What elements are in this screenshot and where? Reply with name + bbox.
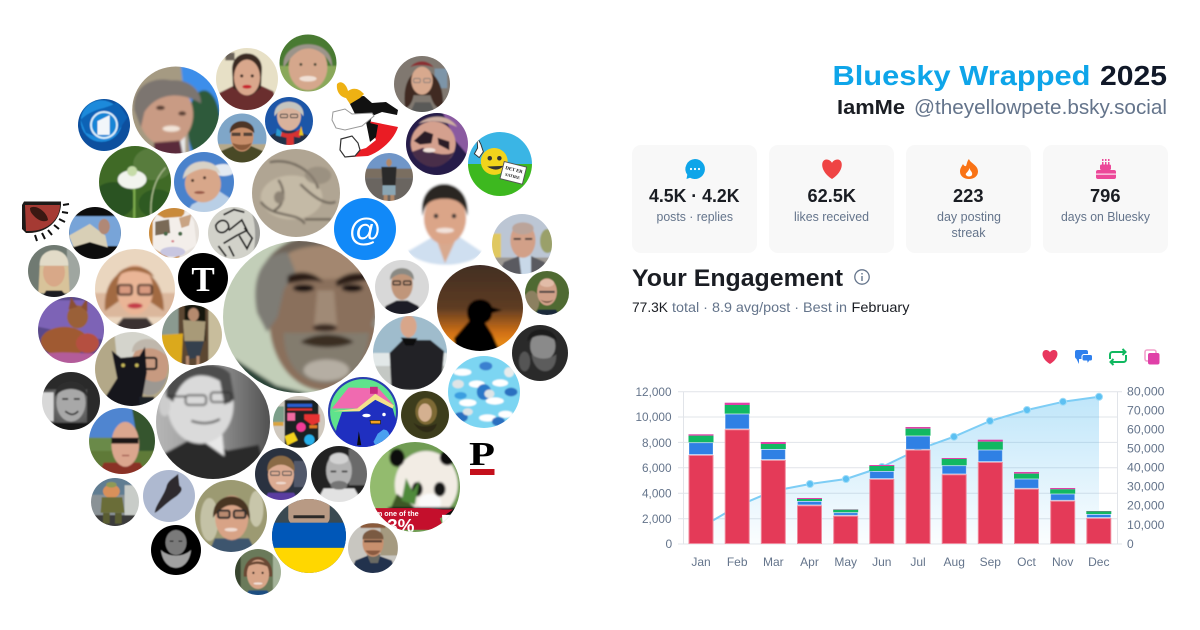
- avatar: man with beard in purple light: [397, 104, 477, 184]
- stat card: day posting streak: 223: [953, 186, 984, 206]
- avatar: bald man among greenery: [518, 264, 576, 322]
- icon: cake: [1096, 159, 1116, 179]
- avatar: Goofy cartoon: [332, 82, 398, 157]
- avatar: woman with red lipstick: [216, 48, 278, 110]
- avatar: tabby cat on purple blanket: [38, 297, 104, 363]
- left axis labels: 4,000: [642, 486, 672, 500]
- stat card: days on Bluesky: [1043, 145, 1168, 253]
- right axis labels: 50,000: [1127, 442, 1165, 456]
- avatar: man on promenade: [358, 146, 420, 208]
- avatar: bald man with sunglasses: [89, 408, 155, 474]
- avatar: emoji with DET ER SATIRE sign: [462, 126, 538, 202]
- stat card: posts and replies: [632, 145, 757, 253]
- icon: heart: [822, 160, 842, 179]
- profile name and handle: @theyellowpete.bsky.social: [914, 97, 1167, 119]
- right axis labels: 0: [1127, 537, 1134, 551]
- profile name and handle: IamMe: [837, 97, 905, 119]
- avatar: cut-out man in light shirt: [386, 166, 504, 284]
- engagement summary: total · 8.9 avg/post · Best in: [672, 299, 847, 315]
- avatar: pencil sketch: [252, 149, 340, 237]
- stat card: likes received: [769, 145, 894, 253]
- month labels: Sep: [980, 555, 1001, 569]
- avatar: news globe: [78, 99, 130, 151]
- icon: flame: [960, 159, 978, 179]
- avatar: older woman on green: [280, 34, 336, 92]
- avatar: man with glasses and purple shirt: [255, 448, 307, 500]
- stat card: likes received: likes received: [794, 209, 869, 224]
- avatar: eagle in pale sky: [143, 470, 195, 522]
- avatar: man in navy shirt: [348, 523, 398, 573]
- avatar: bearded man with black cat: [95, 332, 169, 406]
- stat card: day posting streak: [906, 145, 1031, 253]
- avatar: man in black jacket at the sea: [373, 316, 447, 390]
- avatar: black board with stickers: [273, 396, 325, 448]
- month labels: [691, 555, 1109, 569]
- avatar: cartoon fox soldier: [91, 478, 139, 526]
- avatar: ink drawing: [208, 207, 260, 259]
- stat card: likes received: 62.5K: [808, 186, 856, 206]
- avatar cluster: [20, 26, 576, 602]
- left axis labels: [636, 385, 672, 551]
- avatar: blue duck with pink book hat: [328, 377, 398, 447]
- replies segments: [689, 414, 1111, 518]
- cumulative points: [698, 393, 1102, 531]
- likes segments: [689, 430, 1111, 544]
- icon: heart legend: [1043, 350, 1057, 364]
- icon: quotes legend: [1145, 350, 1160, 364]
- avatar: red turtle eye emblem: [22, 202, 69, 241]
- avatar: bald man in grey suit: [483, 205, 561, 283]
- right axis labels: 60,000: [1127, 422, 1165, 436]
- title: Bluesky Wrapped: [832, 60, 1090, 91]
- logo: P with red bar: P: [469, 436, 495, 473]
- left axis labels: 12,000: [636, 385, 672, 399]
- left axis labels: 2,000: [642, 512, 672, 526]
- left axis labels: 10,000: [636, 410, 672, 424]
- avatar: cat: [149, 208, 199, 258]
- cumulative line: [701, 397, 1099, 528]
- month labels: Feb: [727, 555, 748, 569]
- avatar: old man under blue sky: [174, 152, 234, 212]
- month labels: Apr: [800, 555, 819, 569]
- left axis labels: 8,000: [642, 436, 672, 450]
- month labels: Dec: [1088, 555, 1109, 569]
- title: 2025: [1100, 60, 1167, 91]
- avatar: woman with dark glasses: [195, 480, 267, 552]
- icon: replies legend: [1075, 350, 1092, 364]
- avatar: child in the shadows: [401, 391, 449, 439]
- cumulative area: [701, 397, 1099, 544]
- stat card: day posting streak: day posting: [937, 209, 1001, 224]
- chart legend icons: [1043, 349, 1160, 365]
- right axis labels: 30,000: [1127, 480, 1165, 494]
- quotes segments: [688, 403, 1111, 512]
- avatar: at-sign on blue: [325, 189, 405, 269]
- avatar: black and white smiling man: [42, 372, 100, 430]
- avatar: man in doorway with yellow table: [162, 305, 222, 365]
- engagement summary: February: [852, 299, 910, 315]
- avatar: young woman with headset: [386, 48, 458, 120]
- avatar: Ukraine flag with eyes: [272, 499, 346, 573]
- avatar: large black and white man with glasses: [156, 365, 270, 479]
- left axis labels: 6,000: [642, 461, 672, 475]
- avatar: New York Times logo: [178, 253, 228, 303]
- right axis labels: 10,000: [1127, 518, 1165, 532]
- heading: Your Engagement: Your Engagement: [632, 265, 843, 292]
- right axis labels: [1127, 384, 1165, 551]
- avatar: woman with rainbow scarf: [265, 97, 313, 145]
- right axis labels: 40,000: [1127, 460, 1165, 474]
- avatar: bearded man engraving: [512, 325, 568, 381]
- avatar: white flower: [99, 146, 171, 218]
- avatar: man in glasses outdoors: [218, 114, 266, 162]
- month labels: Jun: [872, 555, 891, 569]
- avatar: selfie man with tree: [132, 66, 220, 154]
- avatar: greyscale bald man: [311, 446, 367, 502]
- avatar: at-sign on blue: @: [348, 212, 382, 248]
- stat card: day posting streak: streak: [952, 225, 986, 240]
- icon: reposts legend: [1110, 349, 1126, 365]
- right axis labels: 80,000: [1127, 384, 1165, 398]
- month labels: Jan: [691, 555, 711, 569]
- avatar: blonde woman in beanie: [28, 245, 80, 297]
- stat card: days on Bluesky: 796: [1090, 186, 1120, 206]
- avatar: bearded man in greyscale on black: [151, 525, 201, 575]
- avatar: large portrait of man with grey hair: [223, 241, 375, 393]
- grid lines: [678, 392, 1122, 544]
- stat card: posts and replies: 4.5K · 4.2K: [649, 186, 740, 206]
- avatar: man in grey glasses: [367, 252, 437, 322]
- stat card: posts and replies: posts · replies: [656, 209, 733, 224]
- avatar: silhouette in sunset: [437, 265, 523, 351]
- reposts segments: [688, 405, 1111, 514]
- avatar: smiling woman among trees: [235, 549, 281, 595]
- right axis labels: 20,000: [1127, 498, 1165, 512]
- icon: chat bubble: [685, 159, 705, 179]
- stacked bar and cumulative line chart: [636, 384, 1165, 569]
- avatar: New York Times logo: T: [191, 260, 215, 299]
- engagement summary: 77.3K: [632, 299, 669, 315]
- engagement summary: [632, 299, 910, 315]
- avatar: panda with red banner: [370, 442, 460, 532]
- month labels: May: [834, 555, 857, 569]
- left axis labels: 0: [666, 537, 672, 551]
- month labels: Oct: [1017, 555, 1036, 569]
- month labels: Mar: [763, 555, 784, 569]
- avatar: illustrated woman with glasses: [95, 249, 175, 329]
- right axis labels: 70,000: [1127, 404, 1165, 418]
- month labels: Aug: [944, 555, 965, 569]
- month labels: Jul: [910, 555, 926, 569]
- avatar: man on black photo: [69, 207, 121, 259]
- month labels: Nov: [1052, 555, 1073, 569]
- stat card: days on Bluesky: days on Bluesky: [1061, 209, 1150, 224]
- icon: info: [855, 270, 869, 284]
- avatar: smurf pattern: [448, 356, 520, 428]
